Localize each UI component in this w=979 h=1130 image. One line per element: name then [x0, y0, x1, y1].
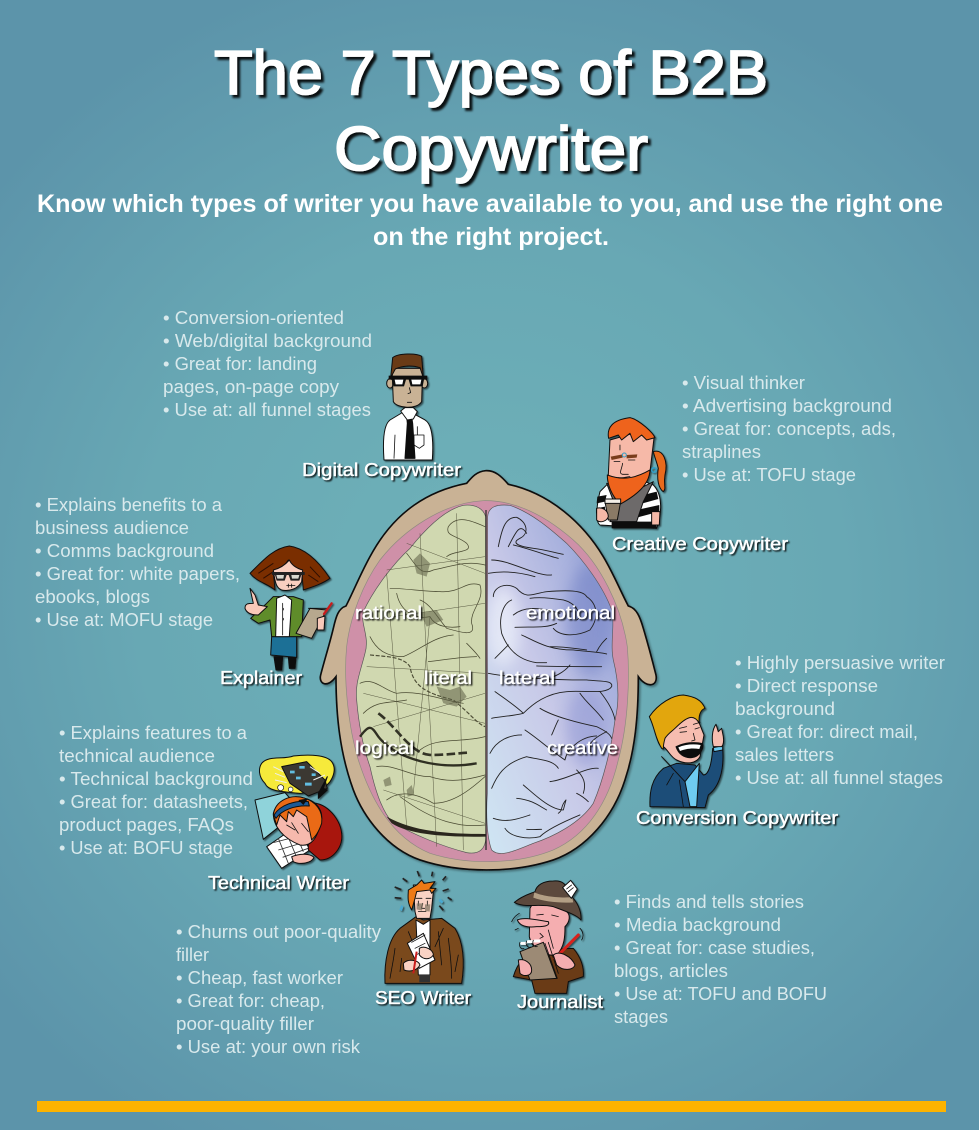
- icon: journalist character: [512, 880, 583, 993]
- text block: technical writer traits: • Technical background: [59, 769, 253, 789]
- text block: journalist traits: • Media background: [614, 915, 781, 935]
- title: The 7 Types of B2B: [214, 39, 768, 108]
- subtitle: on the right project.: [373, 223, 609, 251]
- hemisphere labels: [355, 603, 618, 758]
- text block: explainer traits: • Use at: MOFU stage: [35, 610, 213, 630]
- brain diagram: [320, 471, 656, 870]
- text block: digital copywriter traits: • Use at: all funnel stages: [163, 400, 371, 420]
- text block: conversion copywriter traits: • Use at: all funnel stages: [735, 768, 943, 788]
- label: digital copywriter: Digital Copywriter: [302, 460, 461, 480]
- hemisphere labels: emotional: [526, 603, 615, 623]
- text block: technical writer traits: [59, 723, 253, 858]
- text block: technical writer traits: • Use at: BOFU stage: [59, 838, 233, 858]
- label: explainer: Explainer: [220, 668, 302, 688]
- title: Copywriter: [334, 115, 648, 184]
- text block: journalist traits: blogs, articles: [614, 961, 728, 981]
- text block: digital copywriter traits: • Conversion-oriented: [163, 308, 344, 328]
- text block: journalist traits: stages: [614, 1007, 668, 1027]
- text block: seo writer traits: poor-quality filler: [176, 1014, 314, 1034]
- text block: digital copywriter traits: • Web/digital background: [163, 331, 372, 351]
- text block: explainer traits: • Explains benefits to a: [35, 495, 223, 515]
- panel: digital copywriter: [163, 308, 461, 480]
- scalp ring: [346, 501, 628, 862]
- text block: explainer traits: ebooks, blogs: [35, 587, 150, 607]
- icon: conversion copywriter character: [649, 695, 724, 808]
- right hemisphere: watercolour: [487, 505, 618, 853]
- midline: [485, 510, 487, 850]
- text block: conversion copywriter traits: sales letters: [735, 745, 834, 765]
- text block: technical writer traits: product pages, FAQs: [59, 815, 234, 835]
- panel: conversion copywriter: [636, 653, 945, 828]
- panel: explainer: [35, 495, 332, 688]
- text block: seo writer traits: filler: [176, 945, 209, 965]
- text block: creative copywriter traits: [682, 373, 896, 485]
- text block: conversion copywriter traits: • Highly persuasive writer: [735, 653, 945, 673]
- icon: digital copywriter character: [383, 354, 433, 460]
- text block: journalist traits: [614, 892, 827, 1027]
- text block: creative copywriter traits: • Advertising background: [682, 396, 892, 416]
- text block: conversion copywriter traits: [735, 653, 945, 788]
- footer bar: [37, 1101, 946, 1112]
- text block: creative copywriter traits: • Use at: TOFU stage: [682, 465, 856, 485]
- panel: journalist: [512, 880, 827, 1027]
- subtitle: Know which types of writer you have available to you, and use the right one: [37, 190, 943, 218]
- text block: seo writer traits: • Cheap, fast worker: [176, 968, 343, 988]
- panel: technical writer: [59, 723, 349, 893]
- text block: digital copywriter traits: [163, 308, 372, 420]
- hemisphere labels: lateral: [499, 668, 555, 688]
- text block: conversion copywriter traits: • Direct response: [735, 676, 878, 696]
- text block: journalist traits: • Finds and tells stories: [614, 892, 804, 912]
- label: technical writer: Technical Writer: [208, 873, 349, 893]
- text block: explainer traits: • Great for: white papers,: [35, 564, 240, 584]
- label: seo writer: SEO Writer: [375, 988, 471, 1008]
- text block: seo writer traits: • Great for: cheap,: [176, 991, 325, 1011]
- subtitle: [37, 190, 943, 251]
- icon: explainer character: [245, 546, 332, 670]
- head outline: [320, 471, 656, 870]
- hemisphere labels: logical: [355, 738, 414, 758]
- text block: conversion copywriter traits: background: [735, 699, 835, 719]
- icon: creative copywriter character: [596, 418, 666, 528]
- text block: technical writer traits: • Explains features to a: [59, 723, 248, 743]
- text block: seo writer traits: • Use at: your own risk: [176, 1037, 361, 1057]
- hemisphere labels: rational: [355, 603, 422, 623]
- text block: seo writer traits: [176, 922, 381, 1057]
- left hemisphere: map: [356, 505, 486, 853]
- label: journalist: Journalist: [517, 992, 603, 1012]
- text block: digital copywriter traits: • Great for: landing: [163, 354, 317, 374]
- label: conversion copywriter: Conversion Copywriter: [636, 808, 838, 828]
- panel: seo writer: [176, 871, 471, 1057]
- text block: creative copywriter traits: • Visual thinker: [682, 373, 805, 393]
- title: [214, 39, 768, 184]
- text block: explainer traits: business audience: [35, 518, 189, 538]
- text block: explainer traits: • Comms background: [35, 541, 214, 561]
- hemisphere labels: literal: [424, 668, 472, 688]
- text block: journalist traits: • Great for: case studies,: [614, 938, 815, 958]
- text block: technical writer traits: • Great for: datasheets,: [59, 792, 248, 812]
- icon: technical writer character: [255, 755, 342, 868]
- text block: seo writer traits: • Churns out poor-quality: [176, 922, 381, 942]
- icon: seo writer character: [385, 871, 463, 983]
- panel: creative copywriter: [596, 373, 896, 554]
- text block: creative copywriter traits: • Great for: concepts, ads,: [682, 419, 896, 439]
- text block: explainer traits: [35, 495, 240, 630]
- text block: technical writer traits: technical audience: [59, 746, 215, 766]
- text block: creative copywriter traits: straplines: [682, 442, 761, 462]
- label: creative copywriter: Creative Copywriter: [612, 534, 788, 554]
- text block: digital copywriter traits: pages, on-page copy: [163, 377, 339, 397]
- text block: conversion copywriter traits: • Great for: direct mail,: [735, 722, 918, 742]
- hemisphere labels: creative: [547, 738, 618, 758]
- text block: journalist traits: • Use at: TOFU and BOFU: [614, 984, 827, 1004]
